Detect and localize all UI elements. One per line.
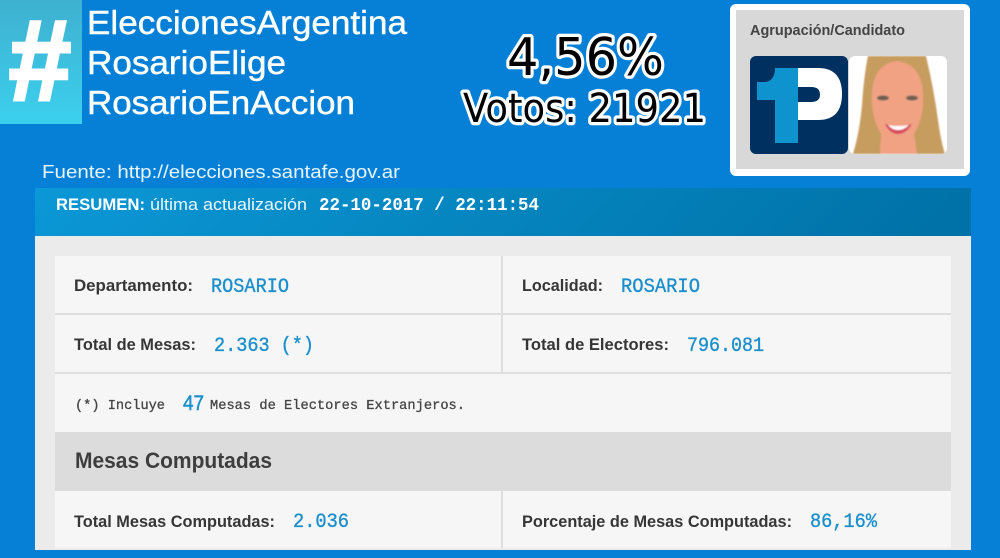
field: total de mesas: Total de Mesas:	[74, 336, 196, 354]
note: foreign voters: (*) Incluye	[75, 398, 165, 414]
field: departamento: Departamento:	[74, 277, 193, 295]
section band: mesas computadas	[55, 432, 951, 491]
field: localidad: Localidad:	[522, 277, 603, 295]
field: total mesas computadas: Total Mesas Computadas:	[74, 513, 275, 531]
icon: party logo 1P	[750, 56, 848, 154]
field: porcentaje mesas computadas: 86,16%	[810, 511, 878, 534]
field: total de electores: Total de Electores:	[522, 336, 669, 354]
section band: mesas computadas: Mesas Computadas	[75, 448, 272, 473]
card heading: Agrupación/Candidato	[750, 23, 905, 39]
field: localidad: ROSARIO	[621, 276, 700, 299]
note: foreign voters: 47	[183, 392, 204, 415]
candidate portrait	[849, 56, 947, 154]
field: porcentaje mesas computadas	[522, 511, 878, 534]
note: foreign voters	[75, 392, 465, 415]
field: porcentaje mesas computadas: Porcentaje de Mesas Computadas:	[522, 513, 792, 531]
note: foreign voters: Mesas de Electores Extranjeros.	[210, 398, 465, 414]
icon: hashtag tile: #	[9, 0, 71, 125]
field: total mesas computadas	[74, 511, 349, 534]
header bar: 22-10-2017 / 22:11:54	[319, 195, 539, 216]
field: departamento	[74, 276, 289, 299]
hashtag titles: EleccionesArgentina	[87, 5, 407, 42]
vote result headline: Votos: 21921	[463, 86, 706, 132]
hashtag titles: RosarioElige	[87, 45, 286, 82]
panel: results summary	[35, 188, 971, 550]
header bar: RESUMEN:	[56, 195, 145, 214]
field: departamento: ROSARIO	[211, 276, 289, 299]
header bar: última actualización	[150, 195, 307, 214]
header bar	[35, 188, 971, 236]
field: total de electores	[522, 335, 764, 358]
source line: Fuente: http://elecciones.santafe.gov.ar	[42, 161, 400, 182]
hashtag titles: RosarioEnAccion	[87, 85, 355, 122]
field: localidad	[522, 276, 700, 299]
hashtag titles	[87, 5, 407, 122]
vote result headline	[463, 28, 706, 132]
field: total de mesas	[74, 335, 314, 358]
vote result headline: 4,56%	[507, 28, 664, 88]
field: total de mesas: 2.363 (*)	[214, 335, 314, 358]
field: total mesas computadas: 2.036	[293, 511, 349, 534]
field: total de electores: 796.081	[687, 335, 764, 358]
panel: candidate card	[730, 4, 970, 176]
